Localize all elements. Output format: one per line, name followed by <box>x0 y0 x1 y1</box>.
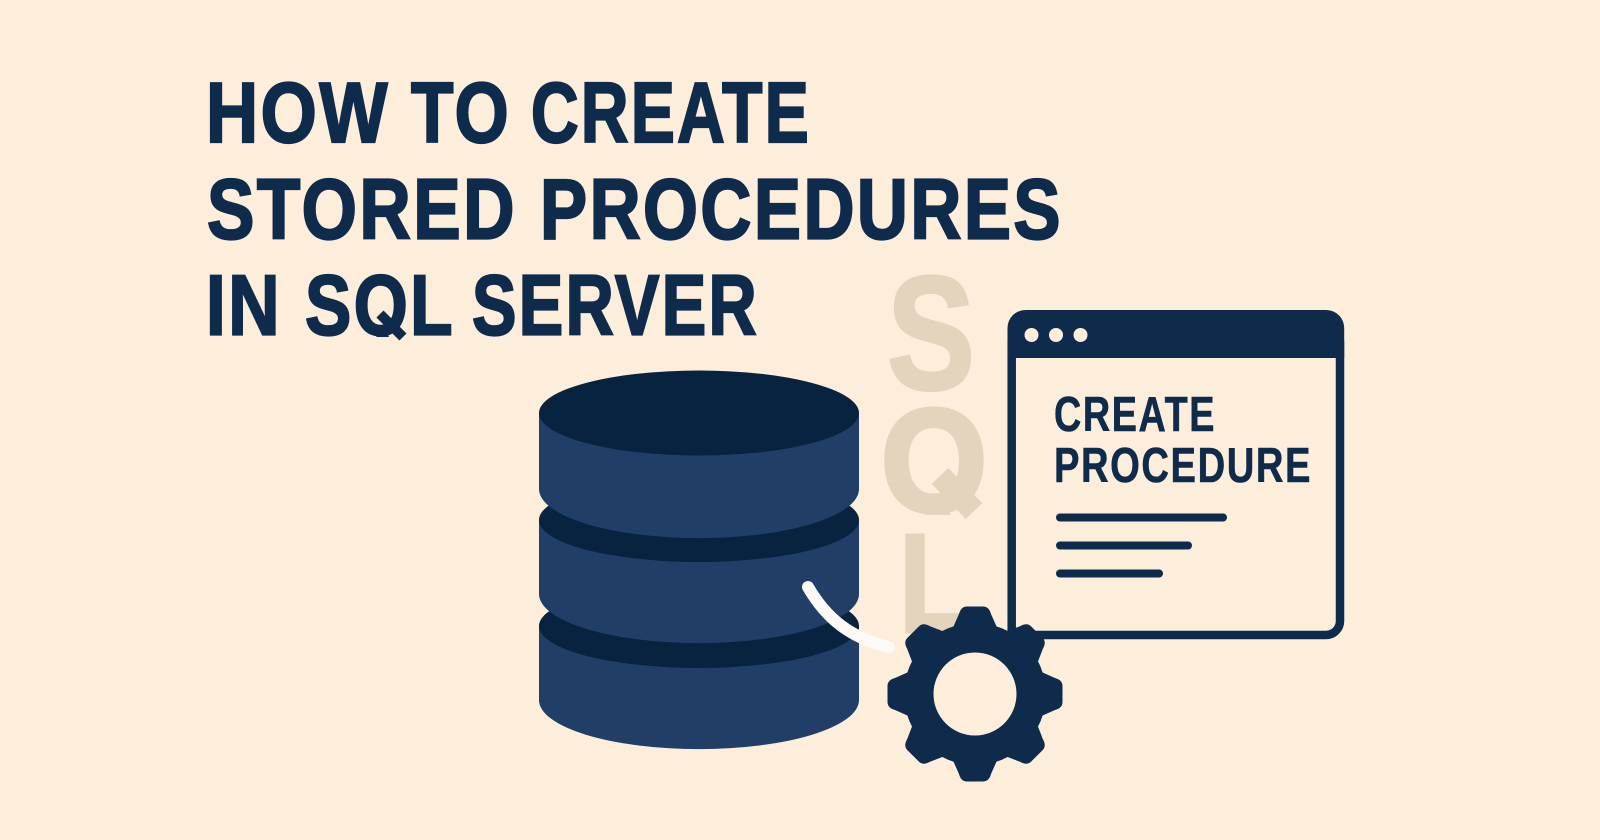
icon: database cylinder <box>539 370 859 749</box>
title: SQL <box>305 258 455 354</box>
title: CREATE <box>531 66 811 161</box>
title Q tail fix <box>350 314 410 357</box>
window control dots <box>1024 328 1088 342</box>
title: SERVER <box>472 258 759 354</box>
window heading: CREATE PROCEDURE: PROCEDURE <box>1054 439 1312 493</box>
title: IN <box>206 258 282 354</box>
database middle tier <box>539 478 859 643</box>
watermark: vertical SQL letters: S <box>887 243 975 424</box>
title: HOW <box>206 66 390 161</box>
title: TO <box>411 66 511 161</box>
watermark: vertical SQL letters: Q <box>881 379 987 542</box>
database bottom tier <box>539 584 859 749</box>
watermark: vertical SQL letters <box>878 243 990 661</box>
database top tier <box>539 370 859 538</box>
connector: white curve from database to gear <box>808 587 889 647</box>
code lines <box>1060 518 1223 574</box>
icon: gear <box>888 606 1062 782</box>
window frame <box>1012 345 1340 635</box>
title: PROCEDURES <box>540 162 1063 258</box>
title: STORED <box>207 162 517 258</box>
window heading: CREATE PROCEDURE: CREATE <box>1054 388 1216 442</box>
window heading: CREATE PROCEDURE <box>1054 388 1312 493</box>
window title bar <box>1008 310 1344 358</box>
panel: code window <box>1008 310 1344 635</box>
title <box>206 66 1063 354</box>
watermark: vertical SQL letters: L <box>900 507 966 661</box>
